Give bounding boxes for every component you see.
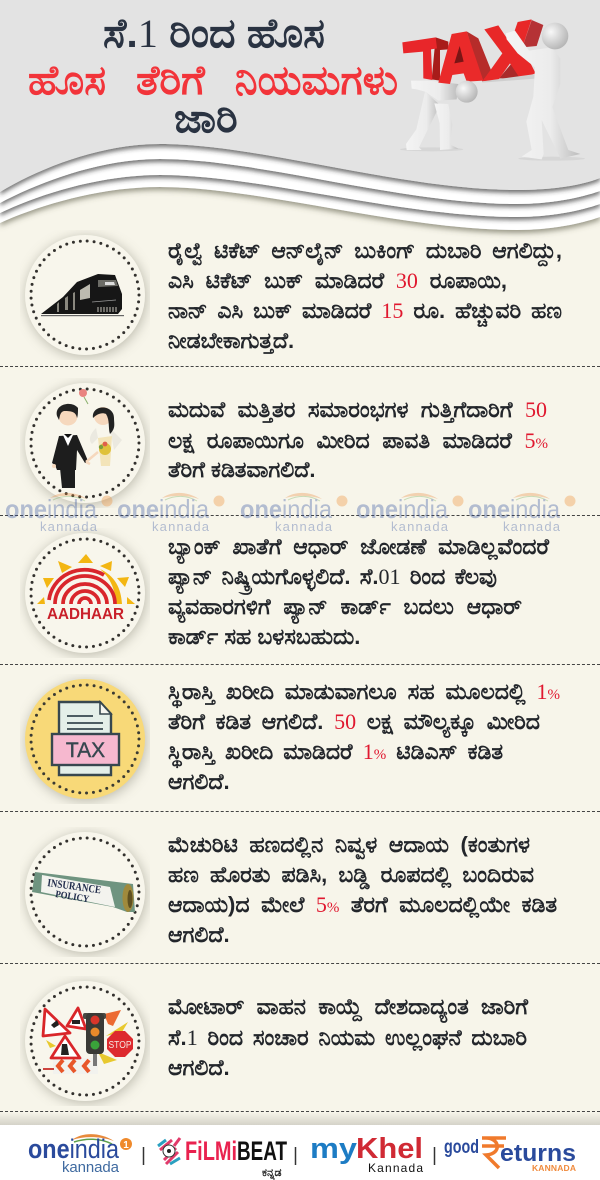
- text block: ರೈಲ್ವೆ ಟಿಕೆಟ್ ಆನ್‌ಲೈನ್ ಬುಕಿಂಗ್ ದುಬಾರಿ ಆಗಲಿದ್ದು,: [168, 238, 562, 263]
- left figure head: [456, 81, 478, 103]
- title line 1: ಸೆ.1 ರಿಂದ ಹೊಸ: [103, 10, 325, 56]
- watermark 1: oneindia: [5, 494, 97, 524]
- logo: goodreturns kannada: [444, 1137, 576, 1173]
- panel: wedding contractors: [0, 367, 600, 516]
- logo: filmibeat: BEAT: [237, 1136, 287, 1166]
- illustration: two figures carrying TAX letters: [400, 19, 585, 160]
- text block: ಕಾರ್ಡ್ ಸಹ ಬಳಸಬಹುದು.: [168, 624, 360, 649]
- watermark 4: [356, 492, 464, 534]
- footer logos: [0, 1115, 600, 1180]
- text block: ನಾನ್ ಎಸಿ ಬುಕ್ ಮಾಡಿದರೆ 15 ರೂ. ಹೆಚ್ಚುವರಿ ಹಣ: [168, 298, 562, 323]
- watermark 2: kannada: [152, 519, 210, 534]
- text block: [168, 994, 528, 1080]
- text block: [168, 397, 548, 482]
- text block: ವ್ಯವಹಾರಗಳಿಗೆ ಪ್ಯಾನ್ ಕಾರ್ಡ್ ಬದಲು ಆಧಾರ್: [168, 594, 522, 619]
- logo: goodreturns kannada: eturns: [500, 1140, 576, 1167]
- header background and wave: [0, 0, 600, 237]
- watermark 3: oneindia: [240, 494, 332, 524]
- text block: ಆಗಲಿದೆ.: [168, 1055, 230, 1080]
- watermark 4: kannada: [391, 519, 449, 534]
- text block: ಬ್ಯಾಂಕ್ ಖಾತೆಗೆ ಆಧಾರ್ ಜೋಡಣೆ ಮಾಡಿಲ್ಲವೆಂದರೆ: [168, 534, 549, 559]
- panel: aadhaar and PAN: [0, 516, 600, 665]
- logo: mykhel kannada: my: [310, 1133, 357, 1165]
- logo: oneindia kannada: oneindia: [28, 1134, 120, 1164]
- text block: ಪ್ಯಾನ್ ನಿಷ್ಕ್ರಿಯಗೊಳ್ಳಲಿದೆ. ಸೆ.01 ರಿಂದ ಕೆಲವು: [168, 564, 497, 589]
- logo: mykhel kannada: Kannada: [368, 1161, 423, 1175]
- text block: [168, 679, 560, 794]
- TAX letters: [402, 19, 543, 84]
- logo: goodreturns kannada: good: [444, 1137, 479, 1158]
- text block: ಆಗಲಿದೆ.: [168, 922, 230, 947]
- watermark 3: [240, 492, 348, 534]
- icon: aadhaar logo: [20, 528, 150, 658]
- title: [28, 10, 398, 141]
- icon: insurance policy roll: [20, 828, 150, 957]
- icon: insurance policy roll: POLICY: [55, 889, 90, 905]
- text block: ಸೆ.1 ರಿಂದ ಸಂಚಾರ ನಿಯಮ ಉಲ್ಲಂಘನೆ ದುಬಾರಿ: [168, 1025, 527, 1050]
- text block: ತೆರಿಗೆ ಕಡಿತವಾಗಲಿದೆ.: [168, 457, 315, 482]
- text block: ಮದುವೆ ಮತ್ತಿತರ ಸಮಾರಂಭಗಳ ಗುತ್ತಿಗೆದಾರಿಗೆ 50: [168, 397, 547, 422]
- text block: ಆದಾಯ)ದ ಮೇಲೆ 5% ತೆರಗೆ ಮೂಲದಲ್ಲಿಯೇ ಕಡಿತ: [168, 892, 557, 917]
- icon: train: [20, 230, 150, 360]
- text block: ಸ್ಥಿರಾಸ್ತಿ ಖರೀದಿ ಮಾಡುವಾಗಲೂ ಸಹ ಮೂಲದಲ್ಲಿ 1%: [168, 679, 560, 704]
- icon: couple: [20, 378, 150, 508]
- text block: ಮೆಚುರಿಟಿ ಹಣದಲ್ಲಿನ ನಿವ್ವಳ ಆದಾಯ (ಕಂತುಗಳ: [168, 832, 530, 857]
- text block: [168, 534, 550, 649]
- icon: traffic signs: [20, 976, 150, 1106]
- logo: filmibeat: ಕನ್ನಡ: [262, 1167, 282, 1180]
- panel: railway tickets: [0, 232, 600, 367]
- icon: tax document: [20, 674, 150, 804]
- icon: tax document: TAX: [66, 739, 105, 762]
- panel: motor vehicle act: [0, 964, 600, 1112]
- text block: ತೆರಿಗೆ ಕಡಿತ ಆಗಲಿದೆ. 50 ಲಕ್ಷ ಮೌಲ್ಯಕ್ಕೂ ಮೀರಿದ: [168, 709, 540, 734]
- icon: traffic signs: STOP: [108, 1040, 132, 1051]
- logo: oneindia kannada: 1: [123, 1140, 129, 1151]
- text block: ಮೋಟಾರ್ ವಾಹನ ಕಾಯ್ದೆ ದೇಶದಾದ್ಯಂತ ಜಾರಿಗೆ: [168, 994, 528, 1019]
- logo: filmibeat: [158, 1136, 287, 1180]
- watermark 5: kannada: [503, 519, 561, 534]
- text block: ಆಗಲಿದೆ.: [168, 769, 230, 794]
- watermark 1: [5, 492, 112, 534]
- logo: filmibeat: FiLMi: [185, 1136, 237, 1166]
- logo: oneindia kannada: kannada: [62, 1159, 120, 1176]
- title line 2: ಹೊಸ ತೆರಿಗೆ ನಿಯಮಗಳು: [28, 57, 398, 103]
- panel: property purchase TDS: [0, 665, 600, 812]
- right figure: [506, 23, 580, 159]
- watermark 4: oneindia: [356, 494, 448, 524]
- text block: [168, 238, 562, 354]
- watermark row: [5, 492, 576, 534]
- panel: insurance maturity: [0, 812, 600, 964]
- watermark 1: kannada: [40, 519, 98, 534]
- watermark 2: oneindia: [117, 494, 209, 524]
- logo: mykhel kannada: [310, 1133, 423, 1175]
- text block: ಎಸಿ ಟಿಕೆಟ್ ಬುಕ್ ಮಾಡಿದರೆ 30 ರೂಪಾಯಿ,: [168, 268, 507, 293]
- title line 3: ಜಾರಿ: [174, 95, 238, 141]
- logo: goodreturns kannada: KANNADA: [532, 1163, 576, 1173]
- icon: insurance policy roll: INSURANCE: [47, 877, 102, 896]
- text block: ಲಕ್ಷ ರೂಪಾಯಿಗೂ ಮೀರಿದ ಪಾವತಿ ಮಾಡಿದರೆ 5%: [168, 428, 548, 453]
- logo: oneindia kannada: [28, 1134, 132, 1176]
- logo: mykhel kannada: Khel: [356, 1133, 423, 1165]
- text block: [168, 832, 557, 947]
- watermark 5: oneindia: [468, 494, 560, 524]
- watermark 5: [468, 492, 576, 534]
- watermark 3: kannada: [275, 519, 333, 534]
- watermark 2: [117, 492, 224, 534]
- text block: ನೀಡಬೇಕಾಗುತ್ತದೆ.: [168, 328, 294, 353]
- left figure body: [406, 81, 458, 150]
- text block: ಹಣ ಹೊರತು ಪಡಿಸಿ, ಬಡ್ಡಿ ರೂಪದಲ್ಲಿ ಬಂದಿರುವ: [168, 862, 534, 887]
- icon: aadhaar logo: AADHAAR: [47, 606, 124, 623]
- text block: ಸ್ಥಿರಾಸ್ತಿ ಖರೀದಿ ಮಾಡಿದರೆ 1% ಟಿಡಿಎಸ್ ಕಡಿತ: [168, 739, 503, 764]
